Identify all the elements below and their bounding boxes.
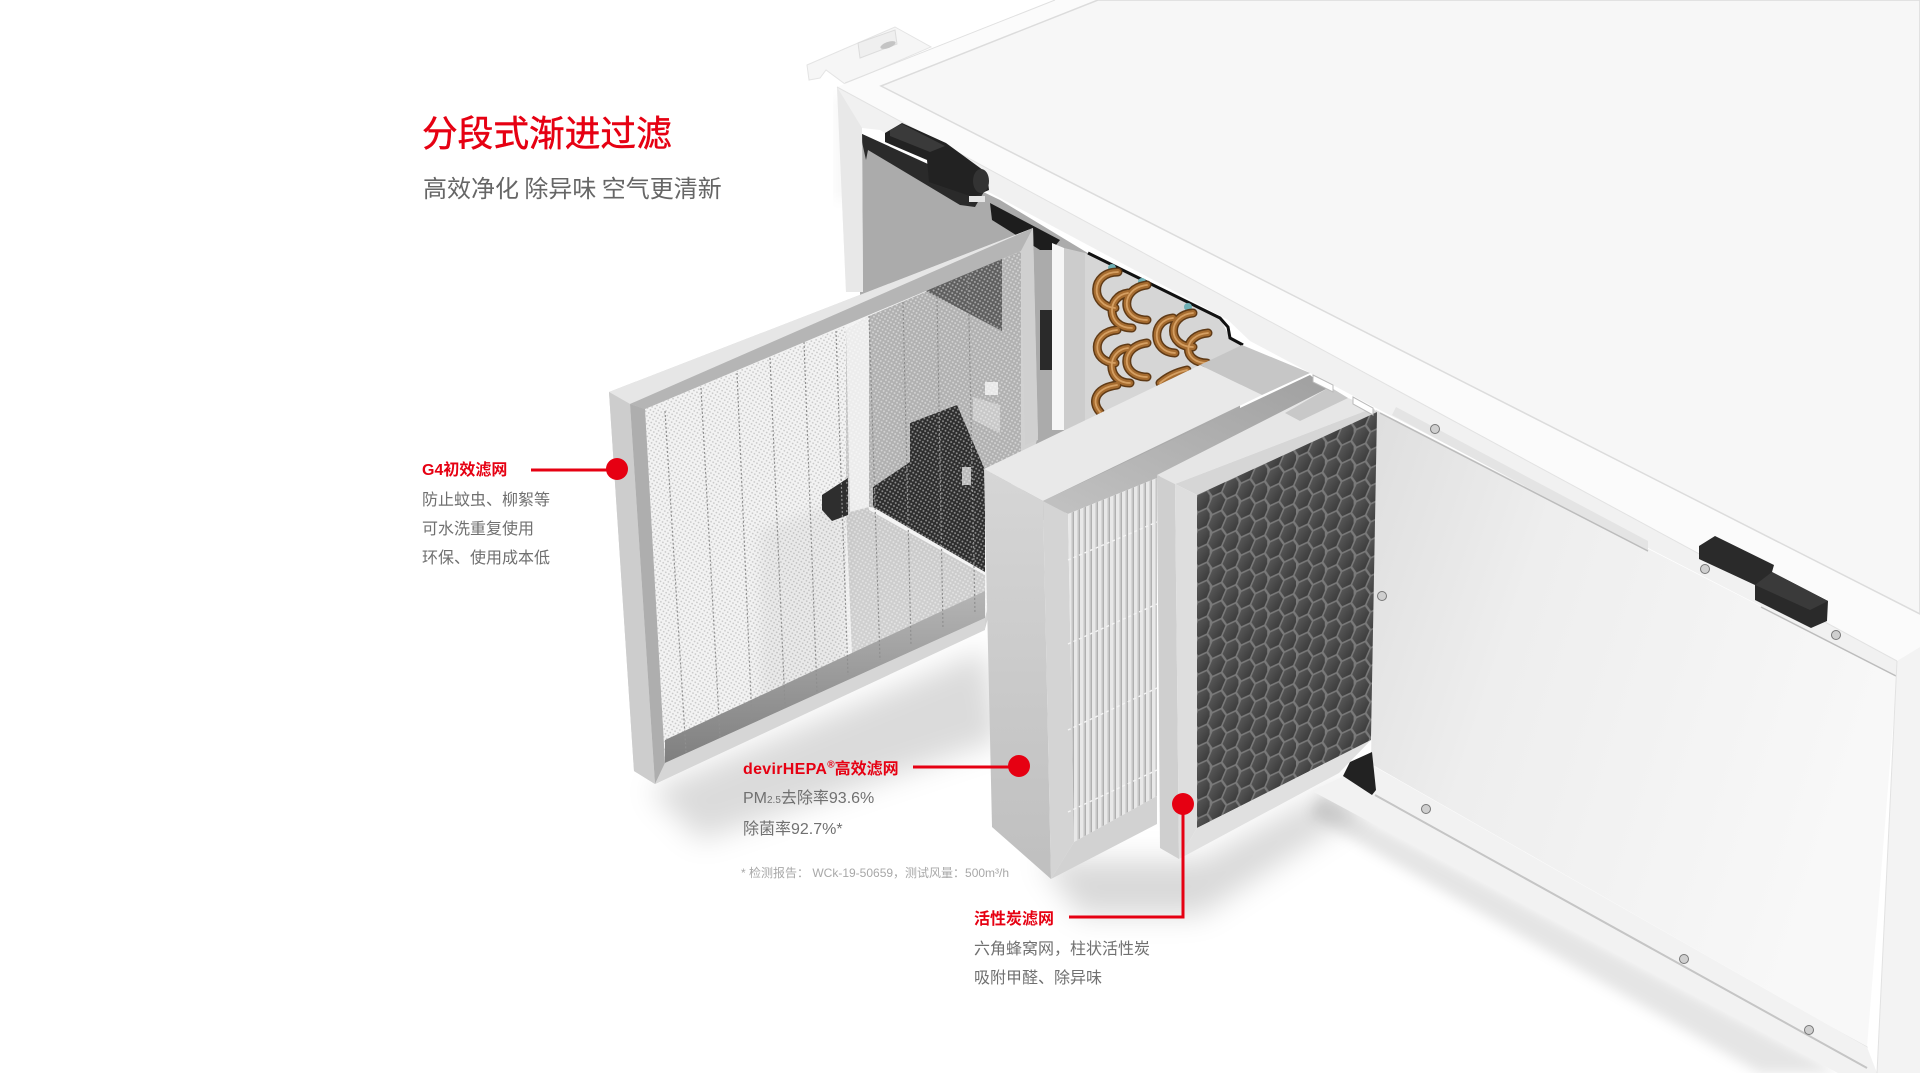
callout line and marker: G4 filter xyxy=(531,458,628,480)
title: 分段式渐进过滤 xyxy=(422,114,672,154)
mesh pleat lines xyxy=(665,270,975,752)
subtitle: 高效净化 除异味 空气更清新 xyxy=(423,176,722,203)
duct tube details xyxy=(1313,375,1333,392)
callout line and marker: HEPA filter xyxy=(913,755,1030,777)
text block: carbon filter xyxy=(974,910,1150,987)
description: G4 filter xyxy=(422,491,550,567)
front face of unit: upper band and left post xyxy=(837,87,1897,676)
right front door panel xyxy=(1371,407,1897,1062)
callout line and marker: carbon filter xyxy=(1069,793,1194,917)
black block near carbon filter xyxy=(1343,752,1376,795)
description: G4 filter: 可水洗重复使用 xyxy=(422,521,534,538)
interior seen through mesh xyxy=(645,251,1021,763)
icon: upper left hinge xyxy=(885,123,989,202)
footnote: * 检测报告： WCk-19-50659，测试风量：500m³/h xyxy=(741,866,1009,880)
text block: G4 filter xyxy=(422,461,550,567)
panel: activated carbon filter xyxy=(1157,375,1377,859)
description: HEPA filter xyxy=(743,789,874,838)
description: carbon filter: 六角蜂窝网，柱状活性炭 xyxy=(974,941,1150,958)
mounting bracket xyxy=(807,27,931,84)
description: carbon filter: 吸附甲醛、除异味 xyxy=(974,970,1102,987)
heading: HEPA filter: devirHEPA®高效滤网 xyxy=(743,760,899,778)
description: HEPA filter: PM2.5去除率93.6% xyxy=(743,790,874,807)
icon: right hinge xyxy=(1699,536,1828,628)
description: HEPA filter: 除菌率92.7%* xyxy=(743,821,843,838)
coil plate with copper tubes xyxy=(1052,243,1243,470)
interior cavity of unit xyxy=(860,133,1240,520)
panel: G4 primary filter door xyxy=(609,228,1038,784)
text block: HEPA filter xyxy=(743,760,899,838)
unit top panel with frame xyxy=(837,0,1920,661)
heading: carbon filter: 活性炭滤网 xyxy=(974,911,1054,928)
honeycomb media xyxy=(1197,412,1377,828)
heading: G4 filter: G4初效滤网 xyxy=(422,462,507,479)
unit frame: right post and bottom rail xyxy=(1312,647,1920,1073)
panel: HEPA filter xyxy=(984,345,1328,879)
description: carbon filter xyxy=(974,940,1150,987)
galvanized bottom strip xyxy=(665,591,985,763)
frame faces xyxy=(609,228,1033,404)
description: G4 filter: 环保、使用成本低 xyxy=(422,550,550,567)
screws xyxy=(1378,424,1840,1034)
description: G4 filter: 防止蚊虫、柳絮等 xyxy=(422,492,550,509)
ground shadows xyxy=(650,95,1840,1073)
